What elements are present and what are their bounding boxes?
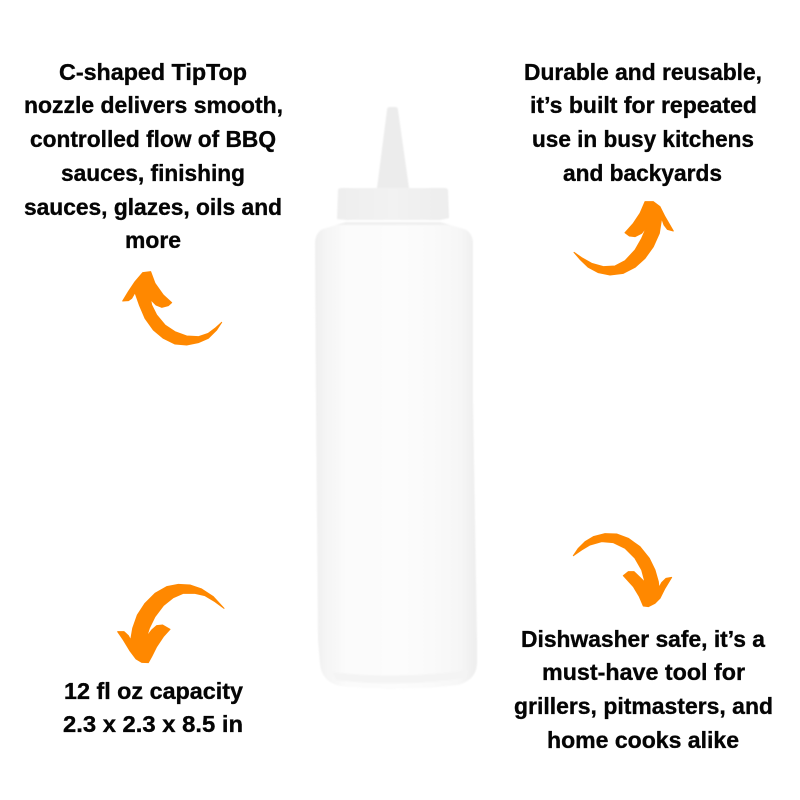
callout: nozzle text: C-shaped TipTop [59,59,247,85]
callout: nozzle text: sauces, finishing [61,160,245,186]
bottle body [315,222,477,689]
callout: capacity text [63,678,243,737]
arrow: up-left toward nozzle [123,272,222,345]
callout: capacity text: 12 fl oz capacity [64,678,243,704]
callout: dishwasher text: grillers, pitmasters, and [514,693,773,719]
callout: durability text: use in busy kitchens [532,126,754,152]
callout: durability text [524,59,762,186]
bottle illustration [315,107,477,689]
callout: dishwasher text: must-have tool for [542,659,745,685]
callout: dishwasher text: home cooks alike [547,727,739,753]
callout: dishwasher text [514,626,773,753]
bottle cap [337,188,449,220]
callout: durability text: and backyards [563,160,722,186]
callout: nozzle text [24,59,283,253]
arrow: down-left toward capacity text [118,584,224,663]
bottle neck shadow [336,222,450,225]
callout: capacity text: 2.3 x 2.3 x 8.5 in [63,711,243,737]
callout: nozzle text: sauces, glazes, oils and [24,194,282,220]
callout: durability text: Durable and reusable, [524,59,762,85]
callout: dishwasher text: Dishwasher safe, it’s a [521,626,765,652]
callout: durability text: it’s built for repeated [530,92,757,118]
callout: nozzle text: controlled flow of BBQ [30,126,276,152]
bottle base highlight [332,670,468,684]
bottle nozzle [377,107,409,188]
callout: nozzle text: nozzle delivers smooth, [24,92,283,118]
arrow: down-right toward dishwasher text [573,534,672,607]
arrow: up-right toward durability text [574,202,673,275]
callout: nozzle text: more [125,227,181,253]
